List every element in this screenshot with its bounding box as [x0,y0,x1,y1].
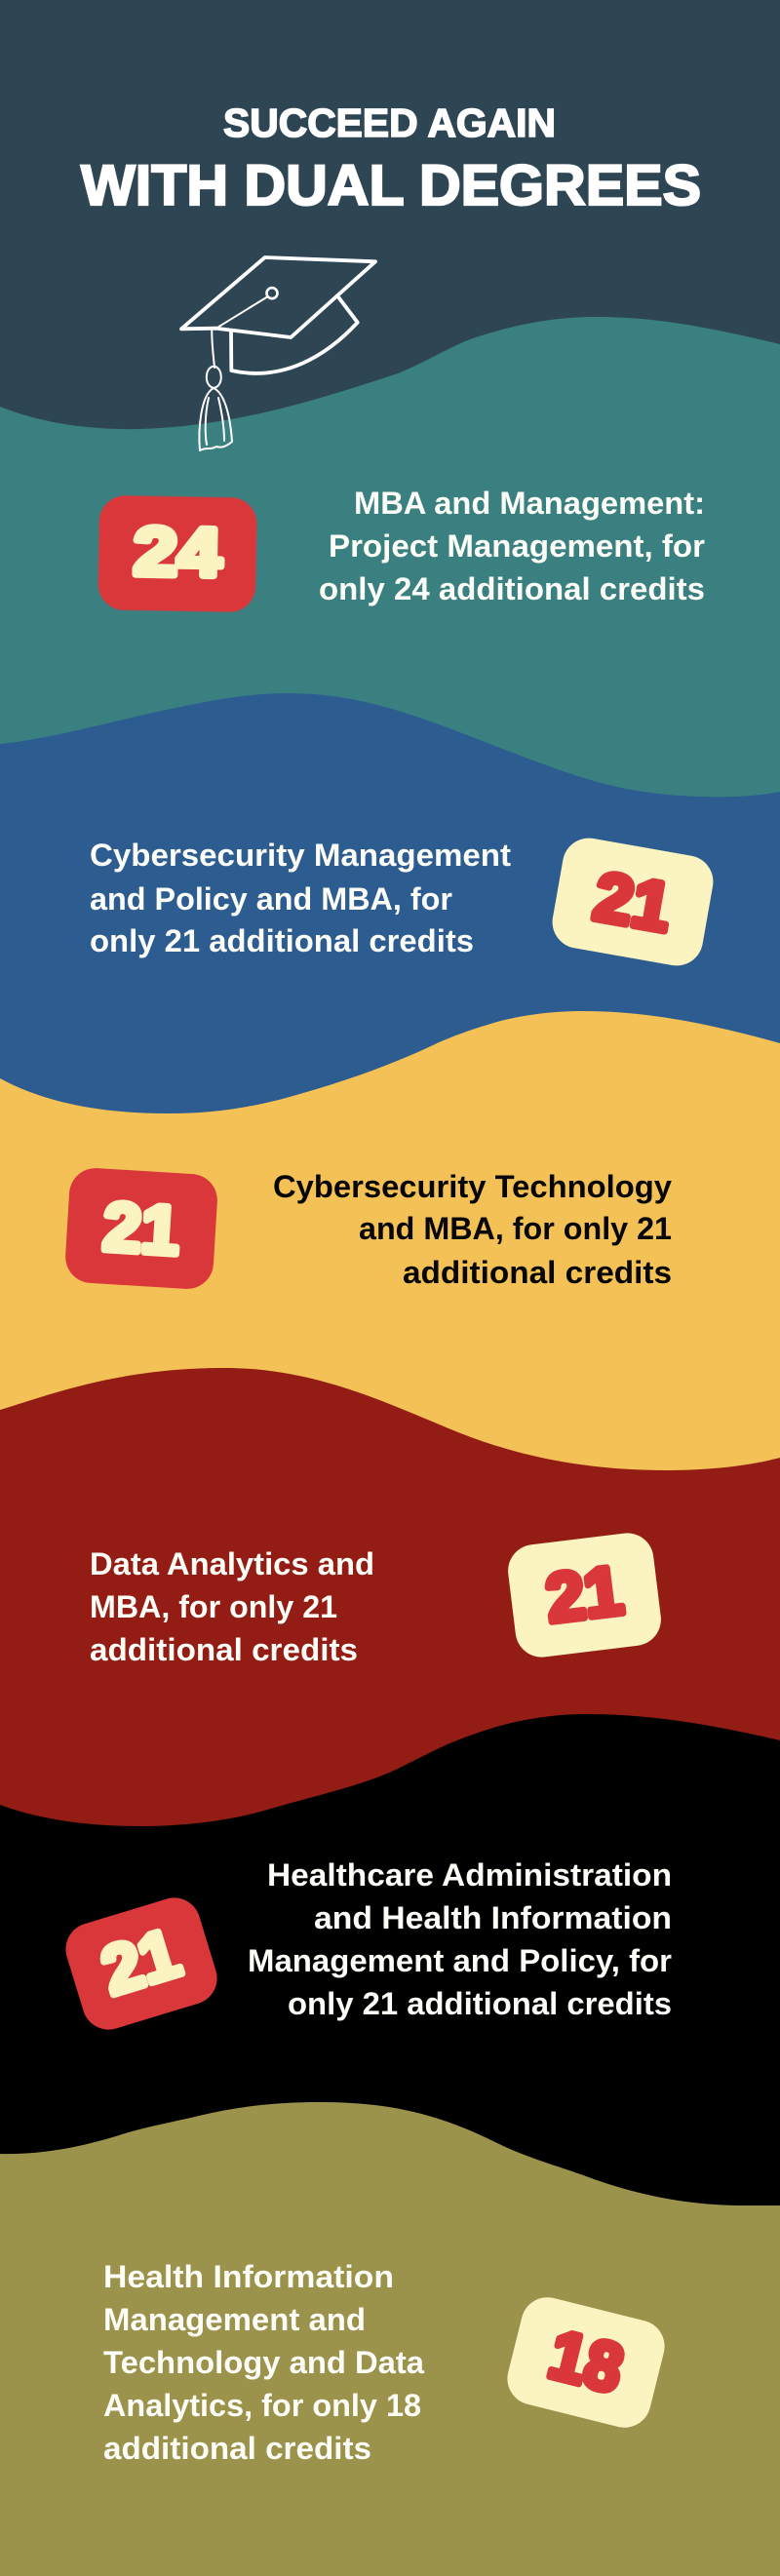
tassel [199,388,232,450]
title line 1: SUCCEED AGAIN [223,100,556,145]
text: Healthcare Administration: only 21 additional credits [288,1986,672,2021]
text: Health Information Management: Analytics, for only 18 [103,2388,421,2423]
badge: 21 red: 21 [101,1189,181,1268]
badge: 21 cream [548,834,718,970]
text: Cybersecurity Technology [273,1169,672,1290]
panel: blue wave [0,693,780,2576]
text: Cybersecurity Management: Cybersecurity Management [90,838,511,873]
title line 2: WITH DUAL DEGREES [81,154,701,217]
tassel knob [207,367,221,388]
panel: olive wave [0,2102,780,2576]
title [81,100,701,217]
panel: MBA and Management [98,486,705,612]
badge: 21 cream: 21 [542,1552,627,1636]
panel: black wave [0,1714,780,2576]
text: Health Information Management: Health Information [103,2259,394,2294]
badge: 21 cream [505,1530,664,1660]
text: Data Analytics: additional credits [90,1632,358,1667]
text: Cybersecurity Technology: additional credits [403,1255,672,1290]
badge: 18 cream [502,2292,670,2433]
text: Cybersecurity Technology: Cybersecurity Technology [273,1169,672,1204]
panel: Health Information Management [103,2259,670,2466]
badge: 21 red: 21 [94,1914,188,2010]
badge: 24 [98,495,257,612]
panel: dark red wave [0,1368,780,2576]
cap skull [231,295,358,373]
text: Data Analytics [90,1546,374,1667]
text: Healthcare Administration: Healthcare Administration [267,1857,672,1893]
cap button [267,288,277,298]
text: Data Analytics: MBA, for only 21 [90,1589,337,1624]
text: Cybersecurity Technology: and MBA, for only 21 [359,1211,672,1246]
badge: 21 cream: 21 [589,858,677,946]
text: MBA and Management: only 24 additional credits [319,571,705,606]
text: Healthcare Administration: and Health Information [314,1900,672,1935]
cap board [181,257,375,337]
badge: 24: 24 [133,513,222,591]
icon: graduation cap [181,257,375,450]
text: Cybersecurity Management [90,838,511,958]
text: Data Analytics: Data Analytics and [90,1546,374,1581]
badge: 18 cream: 18 [542,2316,631,2407]
cap cord [212,297,266,368]
text: Health Information Management: Management and [103,2302,366,2337]
panel: Cybersecurity Management [90,834,718,970]
text: MBA and Management [319,486,705,606]
text: Healthcare Administration [248,1857,672,2021]
panel: yellow wave [0,1011,780,2576]
text: Cybersecurity Management: only 21 additional credits [90,923,474,958]
panel: Data Analytics [90,1530,664,1667]
text: Health Information Management: Technology and Data [103,2345,424,2380]
badge: 21 red [59,1892,223,2036]
text: MBA and Management: MBA and Management: [354,486,705,521]
text: Cybersecurity Management: and Policy and MBA, for [90,881,452,917]
panel: Healthcare Administration [59,1857,672,2036]
badge: 21 red [64,1166,218,1291]
panel: Cybersecurity Technology [64,1166,672,1291]
text: Health Information Management [103,2259,424,2466]
text: MBA and Management: Project Management, for [329,528,705,564]
text: Health Information Management: additional credits [103,2431,371,2466]
text: Healthcare Administration: Management and Policy, for [248,1943,672,1978]
